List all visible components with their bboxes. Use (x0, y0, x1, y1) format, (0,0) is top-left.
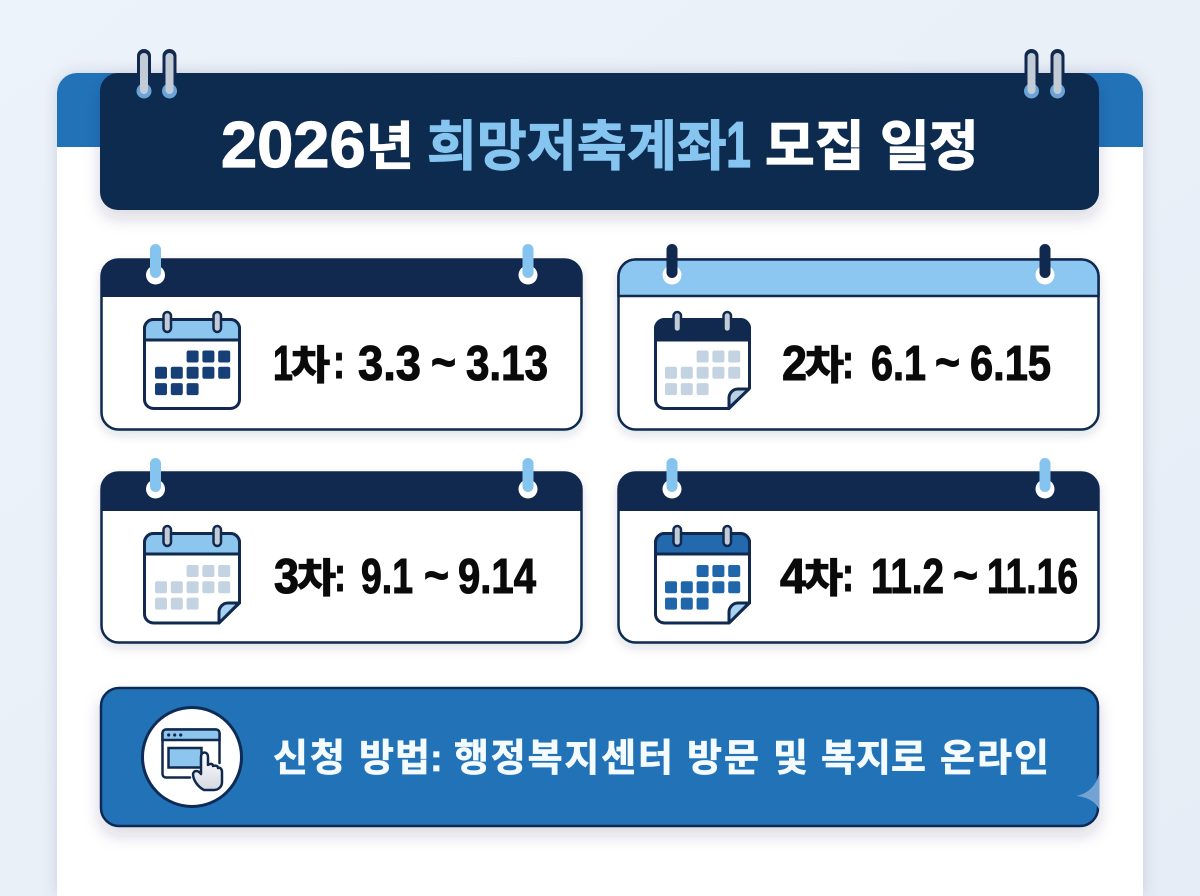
date text: 9.1 (361, 550, 413, 604)
method text: 방문 (687, 727, 759, 782)
date text: 차 (804, 557, 843, 601)
icon: card 1 rings (146, 244, 538, 284)
date text: ~ (935, 336, 960, 390)
title: 2026 (221, 108, 366, 181)
method text (273, 727, 1049, 782)
date text: : (842, 335, 854, 389)
date text: 4 (780, 550, 806, 604)
icon: binder rings right (1024, 49, 1065, 98)
icon: card 4 rings (662, 458, 1054, 498)
panel: round 2 card (618, 244, 1098, 430)
title: 일정 (880, 102, 979, 181)
icon: calendar 3 (144, 526, 240, 623)
icon: binder rings left (136, 49, 177, 98)
date text: 1 (273, 337, 293, 391)
icon: browser click (142, 708, 242, 806)
title: 희망저축계좌 (427, 102, 727, 181)
date text: 3.3 (358, 337, 421, 391)
date text (782, 335, 1051, 391)
title: 1 (726, 108, 751, 181)
method text: 신청 (273, 727, 345, 782)
date text: : (334, 548, 346, 602)
panel: application method bar (101, 688, 1100, 826)
icon: calendar 4 (656, 526, 750, 623)
method text: 복지로 (821, 727, 926, 782)
date text (273, 335, 548, 391)
method text: 행정복지센터 (454, 727, 673, 782)
date text: 9.14 (458, 550, 536, 604)
panel: round 1 card (100, 244, 582, 430)
date text: ~ (431, 336, 456, 390)
icon: calendar 1 (144, 312, 240, 408)
title (221, 102, 979, 181)
icon: card 2 rings (662, 244, 1054, 284)
panel: round 3 card (100, 458, 582, 642)
title: 년 (366, 105, 414, 180)
date text: ~ (953, 549, 978, 603)
panel: round 4 card (618, 458, 1100, 642)
date text: 6.15 (970, 337, 1051, 391)
date text: ~ (424, 549, 449, 603)
method text: 방법 (359, 727, 430, 782)
icon: page curl (1076, 772, 1100, 810)
method text: 및 (773, 727, 808, 782)
icon: calendar 2 (656, 312, 750, 408)
date text: 2 (782, 337, 807, 391)
date text: : (333, 335, 345, 389)
panel: title banner (100, 73, 1099, 210)
date text (274, 548, 536, 604)
icon: card 3 rings (146, 458, 538, 498)
date text: 차 (297, 557, 336, 601)
date text: 3.13 (466, 337, 548, 391)
date text: 차 (805, 344, 844, 388)
title: 모집 (765, 102, 865, 181)
date text: 6.1 (871, 337, 926, 391)
date text (780, 548, 1078, 604)
date text: 3 (274, 550, 299, 604)
method text: : (430, 738, 443, 780)
date text: 11.16 (987, 550, 1078, 604)
date text: 11.2 (871, 550, 944, 604)
method text: 온라인 (940, 727, 1049, 782)
date text: : (842, 548, 854, 602)
date text: 차 (291, 344, 330, 388)
